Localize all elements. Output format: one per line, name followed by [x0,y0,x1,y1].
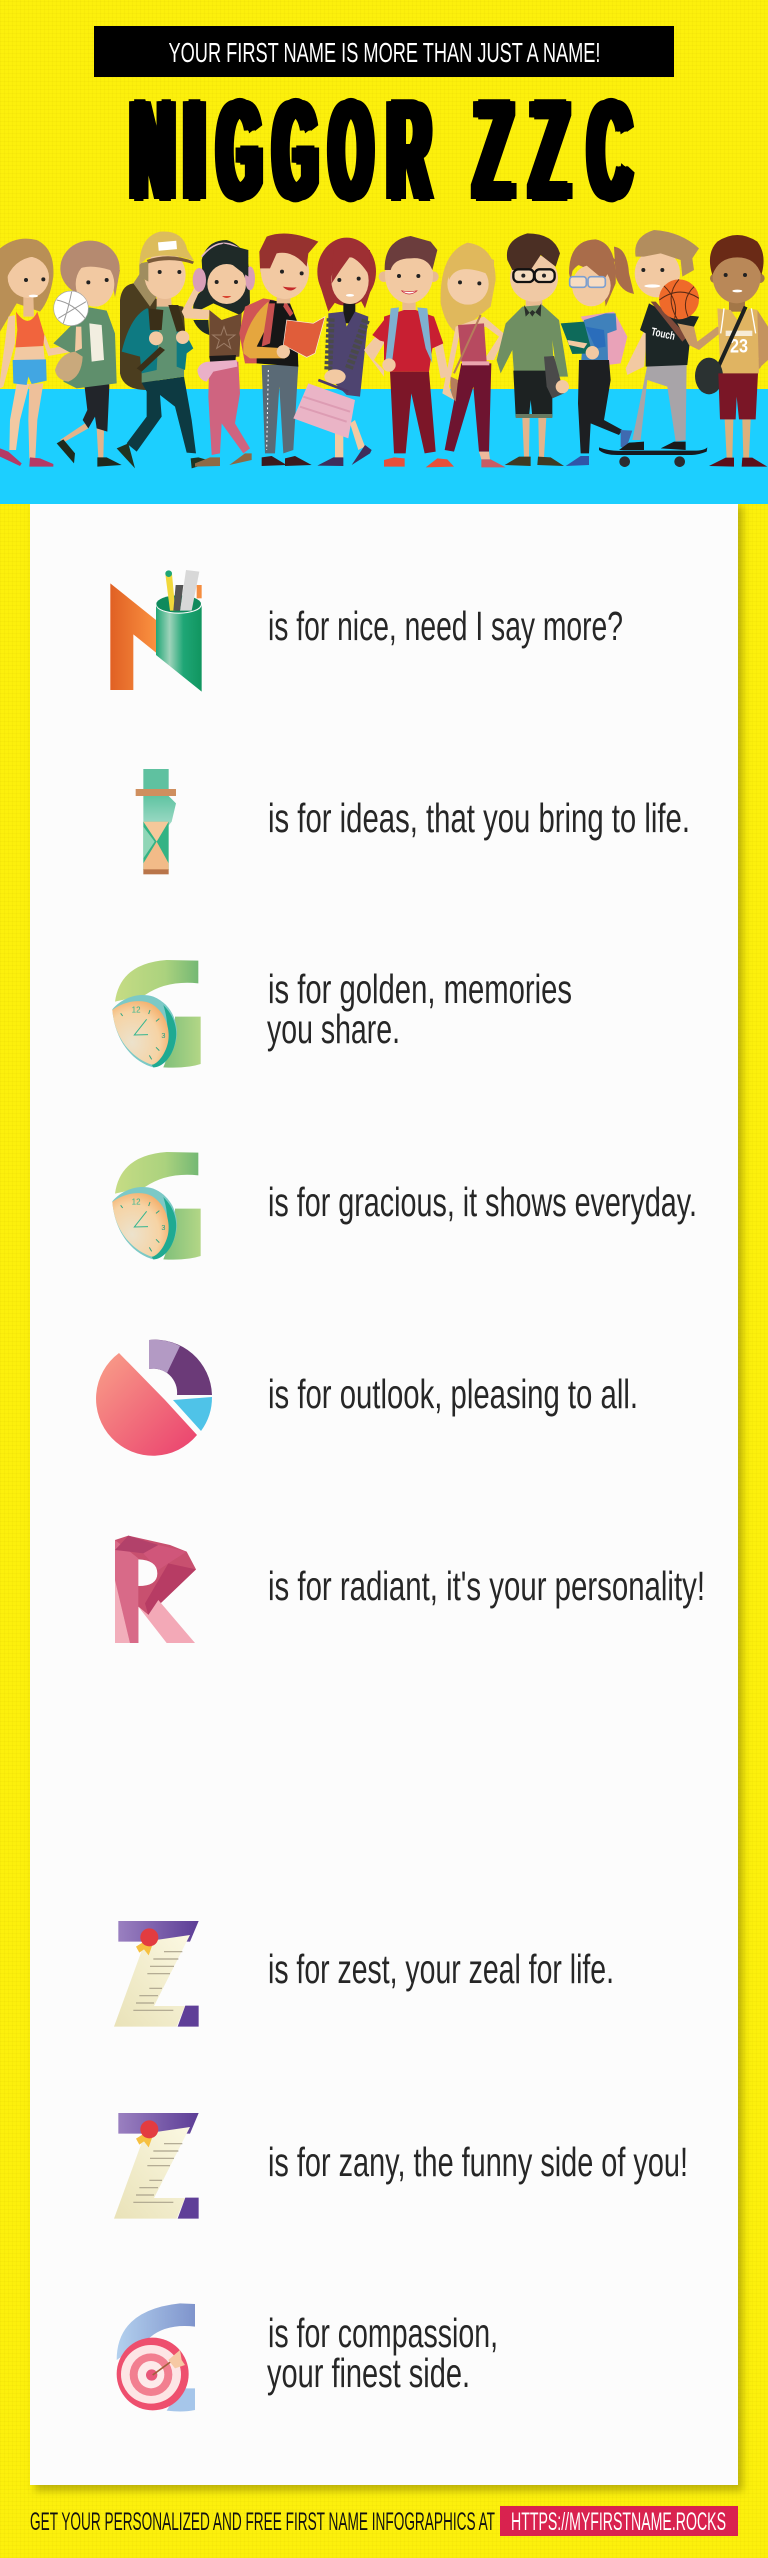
title: first name: Z [530,71,568,230]
text: G golden lines [267,966,572,1052]
person: boy with red book [239,233,325,466]
text: C lines: your finest side. [267,2350,470,2396]
title: first name: R [388,71,430,230]
person: blonde girl [441,243,506,467]
person: girl with orange top [0,239,73,467]
person: girl with volleyball [53,241,122,467]
icon: second letter Z certificate [114,2113,199,2219]
title: first name: I [184,71,203,230]
person: hiker with backpack and cap [117,232,213,468]
heading bar: tagline [94,26,674,77]
title: first name: G [218,71,261,230]
title: first name [129,71,635,230]
icon: second letter G clock [112,1152,201,1260]
banner: blue floor band [0,389,768,504]
icon: letter G clock [112,960,201,1068]
panel: white content card [30,500,738,2485]
illustration: group of students [0,230,768,468]
text: C lines [267,2310,498,2396]
title: first name: N [130,71,174,230]
title: first name: G [274,71,317,230]
title: first name: O [330,71,371,230]
title: first name: Z [474,71,512,230]
person: boy in yellow tank top: 23 [730,336,748,357]
icon: letter R gem [115,1536,196,1643]
text: G golden lines: is for golden, memories [268,966,572,1012]
icon: letter C target [117,2303,195,2412]
person: skater with basketball [599,230,724,467]
title: first name: C [588,71,630,230]
person: skater with basketball: Touch [650,326,676,343]
person: boy in yellow tank top [695,235,768,467]
text: Z zest line: is for zest, your zeal for life. [268,1946,614,1992]
icon: letter O pie chart [96,1340,212,1456]
text: N line: is for nice, need I say more? [268,603,623,649]
icon: letter N with pencil cup [110,570,202,692]
text: C lines: is for compassion, [268,2310,498,2356]
person: boy with red shirt [364,236,454,467]
icon: letter I hourglass [136,769,176,874]
person: boy with glasses [497,233,569,466]
person: girl with tablet and ponytail [561,239,634,466]
text: G golden lines: you share. [267,1006,400,1052]
person: girl with pink bag [293,238,376,466]
person: girl with headphones [182,240,255,467]
text: O line: is for outlook, pleasing to all. [268,1371,638,1417]
icon: letter Z certificate [114,1921,199,2027]
